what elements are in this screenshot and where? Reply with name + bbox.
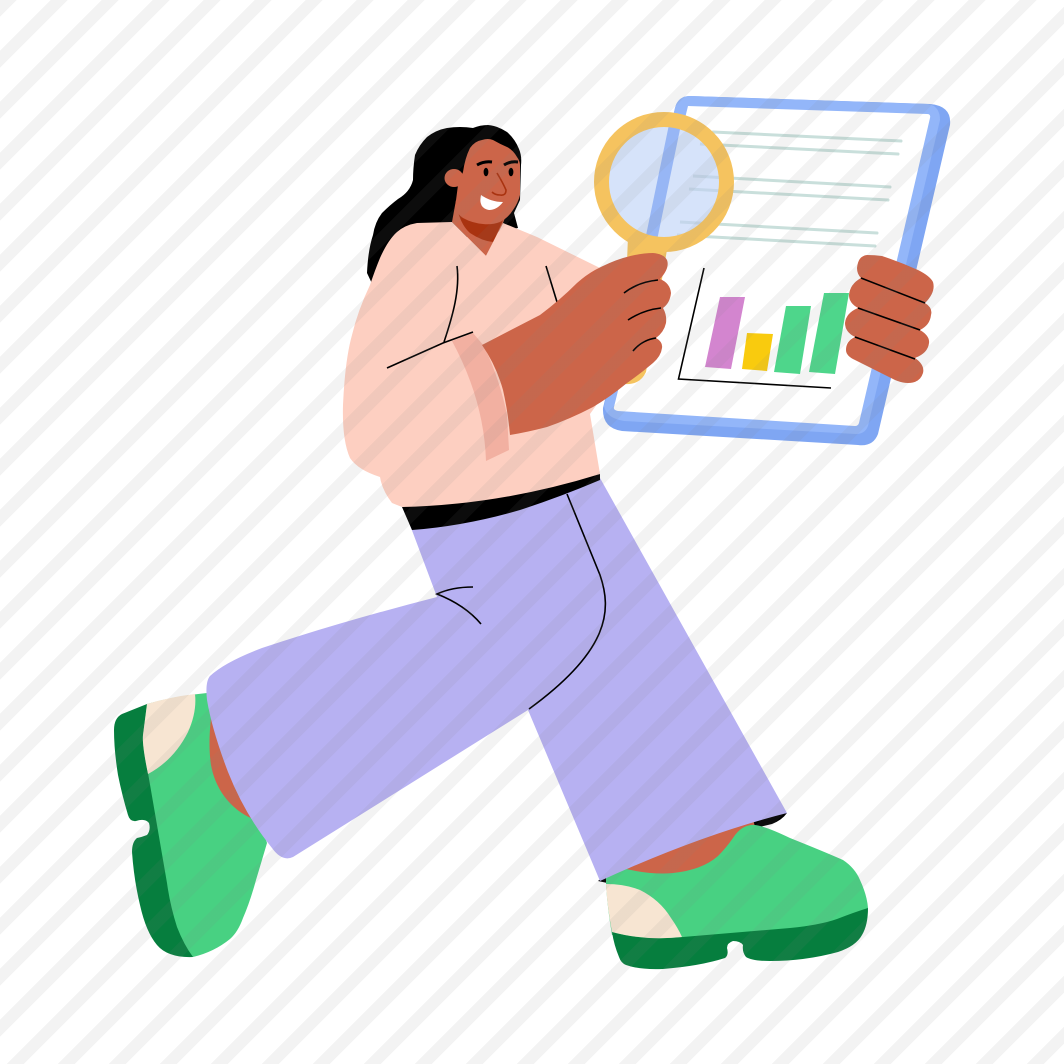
- finger separators: [855, 278, 925, 359]
- hair: [367, 125, 521, 290]
- smile: [480, 195, 503, 210]
- report board: [603, 96, 950, 445]
- ring: [602, 120, 726, 244]
- right shoe upper: [606, 825, 868, 945]
- handle: [610, 236, 668, 384]
- trouser fold lines: [529, 494, 605, 709]
- ear: [444, 169, 464, 187]
- gripping hand: [845, 255, 934, 383]
- holding hand and forearm: [482, 253, 671, 435]
- right shoe (front foot): [598, 813, 868, 969]
- left shoe sole: [114, 704, 193, 957]
- sweater cuff: [452, 333, 509, 461]
- nose: [492, 173, 506, 195]
- paper sheet: [614, 106, 930, 426]
- neck: [452, 200, 510, 256]
- lens: [609, 127, 719, 237]
- face: [444, 139, 520, 224]
- sweater: [343, 222, 640, 507]
- right ankle: [616, 816, 756, 880]
- neck shadow: [458, 205, 510, 242]
- text lines: [677, 132, 901, 246]
- right shoe cream toe cap: [606, 884, 682, 938]
- magnifying glass: [594, 112, 734, 384]
- right shoe sole: [612, 908, 868, 969]
- bar chart: [678, 268, 849, 388]
- sweater fold lines: [444, 266, 458, 342]
- sock: [598, 813, 787, 884]
- left shoe upper: [143, 693, 267, 957]
- left ankle: [210, 715, 262, 819]
- head: [455, 139, 520, 224]
- belt: [402, 474, 600, 530]
- eyes: [484, 168, 488, 176]
- board shadow edge: [603, 96, 950, 445]
- left shoe cream toe cap: [143, 694, 195, 774]
- left shoe (rear foot): [114, 693, 267, 957]
- eyebrows: [477, 162, 518, 165]
- trousers: [206, 478, 787, 881]
- illustration: woman with magnifying glass and report: [114, 96, 950, 970]
- board face: [604, 96, 940, 434]
- finger creases: [624, 280, 661, 351]
